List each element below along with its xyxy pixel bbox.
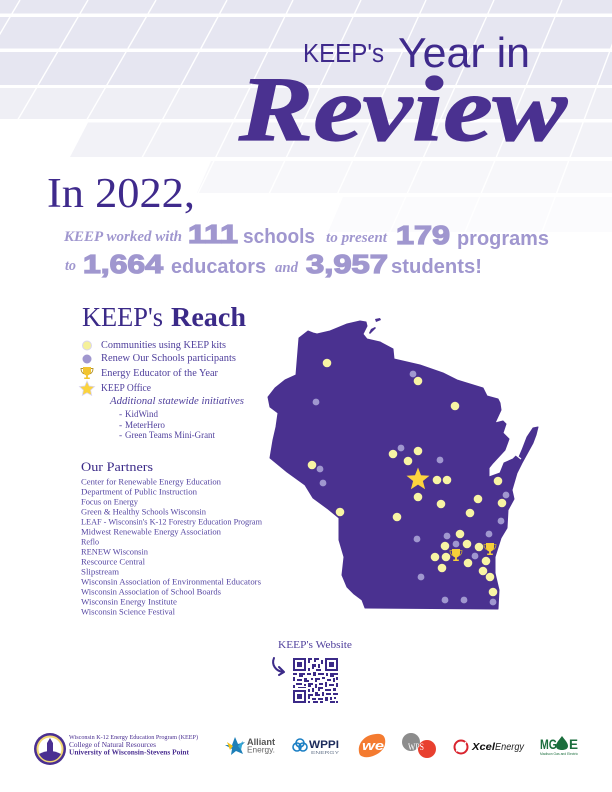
trophy marker bbox=[450, 549, 462, 561]
heading: In 2022: In 2022, bbox=[47, 171, 195, 217]
logo: WPPI Energy: WPPI bbox=[309, 739, 339, 751]
additional statewide initiatives: Additional statewide initiatives bbox=[109, 396, 244, 407]
heading: KEEP's Reach bbox=[82, 302, 246, 332]
logo: WPPI Energy: ENERGY bbox=[311, 750, 340, 756]
partners list: Green & Healthy Schools Wisconsin bbox=[81, 506, 207, 516]
logo: MGE bbox=[540, 736, 578, 756]
legend bbox=[80, 340, 236, 395]
Renew Our Schools dots bbox=[313, 371, 509, 605]
icon: community dot bbox=[82, 341, 92, 350]
additional statewide initiatives: - bbox=[119, 431, 122, 441]
islands bbox=[369, 318, 381, 334]
text: KEEP and college name bbox=[69, 734, 198, 756]
additional statewide initiatives bbox=[109, 396, 244, 441]
partners list: Wisconsin Association of School Boards bbox=[81, 586, 222, 596]
stats sentence: 179 bbox=[396, 220, 450, 250]
map of Wisconsin bbox=[268, 318, 538, 609]
logo: WPPI Energy bbox=[293, 739, 340, 756]
stats sentence: 3,957 bbox=[306, 249, 388, 279]
stats sentence: students! bbox=[391, 256, 482, 278]
stats sentence: to present bbox=[326, 230, 388, 246]
partners list: RENEW Wisconsin bbox=[81, 546, 149, 556]
icon: trophy bbox=[81, 367, 93, 379]
legend: Renew Our Schools participants bbox=[101, 353, 236, 364]
heading: Our Partners: Our Partners bbox=[81, 459, 153, 474]
title: KEEP's bbox=[303, 40, 384, 68]
stats sentence bbox=[63, 219, 549, 279]
logo: MGE: E bbox=[569, 736, 578, 752]
stats sentence: programs bbox=[457, 228, 549, 250]
heading: KEEP's Reach: KEEP's bbox=[82, 302, 163, 332]
logo: MGE: MG bbox=[540, 736, 557, 752]
additional statewide initiatives: Green Teams Mini-Grant bbox=[125, 431, 215, 441]
logo: Xcel Energy bbox=[454, 740, 525, 754]
logo: Xcel Energy: Energy bbox=[495, 742, 525, 753]
legend: KEEP Office bbox=[101, 383, 151, 394]
title: Review bbox=[238, 58, 568, 160]
partners list: Slipstream bbox=[81, 566, 119, 576]
logo: Alliant Energy: Alliant bbox=[247, 737, 276, 748]
partners list: Rescource Central bbox=[81, 556, 146, 566]
stats sentence: schools bbox=[243, 226, 315, 248]
additional statewide initiatives: - bbox=[119, 421, 122, 431]
additional statewide initiatives: KidWind bbox=[125, 410, 158, 420]
background: solar panel grid bbox=[0, 0, 612, 232]
title: Year in bbox=[398, 29, 530, 76]
website label: KEEP's Website bbox=[278, 640, 352, 651]
logo: Xcel Energy: Xcel bbox=[471, 742, 495, 753]
logo: WPS: WPS bbox=[408, 742, 424, 752]
text: KEEP and college name: Wisconsin K-12 Energy Education Program (KEEP) bbox=[69, 734, 198, 741]
logo: UW-Stevens Point seal bbox=[34, 733, 66, 765]
legend: Energy Educator of the Year bbox=[101, 368, 218, 379]
stats sentence: and bbox=[275, 260, 298, 276]
legend: Communities using KEEP kits bbox=[101, 340, 226, 351]
KEEP office star bbox=[406, 468, 430, 489]
text: KEEP and college name: University of Wisconsin-Stevens Point bbox=[69, 748, 189, 756]
KEEP kits community dots bbox=[308, 359, 506, 596]
partners list bbox=[81, 459, 262, 616]
partners list: Midwest Renewable Energy Association bbox=[81, 526, 222, 536]
QR code bbox=[293, 658, 338, 703]
partners list: Focus on Energy bbox=[81, 496, 139, 506]
partners list: Center for Renewable Energy Education bbox=[81, 476, 222, 486]
logo: Alliant Energy: Energy. bbox=[247, 744, 275, 754]
partners list: Department of Public Instruction bbox=[81, 486, 198, 496]
arrow to QR code bbox=[273, 658, 284, 675]
icon: Renew Our Schools dot bbox=[82, 354, 92, 364]
text: KEEP and college name: College of Natural Resources bbox=[69, 740, 156, 749]
title bbox=[238, 29, 568, 160]
additional statewide initiatives: - bbox=[119, 410, 122, 420]
trophy marker bbox=[484, 543, 496, 555]
map shape bbox=[268, 321, 538, 609]
stats sentence: 111 bbox=[188, 219, 238, 249]
icon: star bbox=[80, 381, 94, 395]
heading: KEEP's Reach: Reach bbox=[171, 302, 246, 332]
stats sentence: 1,664 bbox=[83, 249, 164, 279]
additional statewide initiatives: MeterHero bbox=[125, 421, 165, 431]
logo: Alliant Energy bbox=[225, 737, 276, 755]
logo: We Energies bbox=[359, 734, 385, 757]
Sturgeon Bay cut bbox=[516, 455, 521, 459]
logo: WPS bbox=[402, 733, 436, 758]
partners list: Reflo bbox=[81, 536, 99, 546]
stats sentence: educators bbox=[171, 256, 266, 278]
logo: We Energies: we bbox=[362, 738, 384, 753]
stats sentence: KEEP worked with bbox=[63, 229, 182, 245]
logo: MGE: Madison Gas and Electric bbox=[540, 752, 578, 756]
partners list: Wisconsin Association of Environmental Educators bbox=[81, 576, 262, 586]
stats sentence: to bbox=[65, 258, 76, 274]
partners list: LEAF - Wisconsin's K-12 Forestry Education Program bbox=[81, 516, 262, 526]
partners list: Wisconsin Energy Institute bbox=[81, 596, 177, 606]
partners list: Wisconsin Science Festival bbox=[81, 606, 176, 616]
